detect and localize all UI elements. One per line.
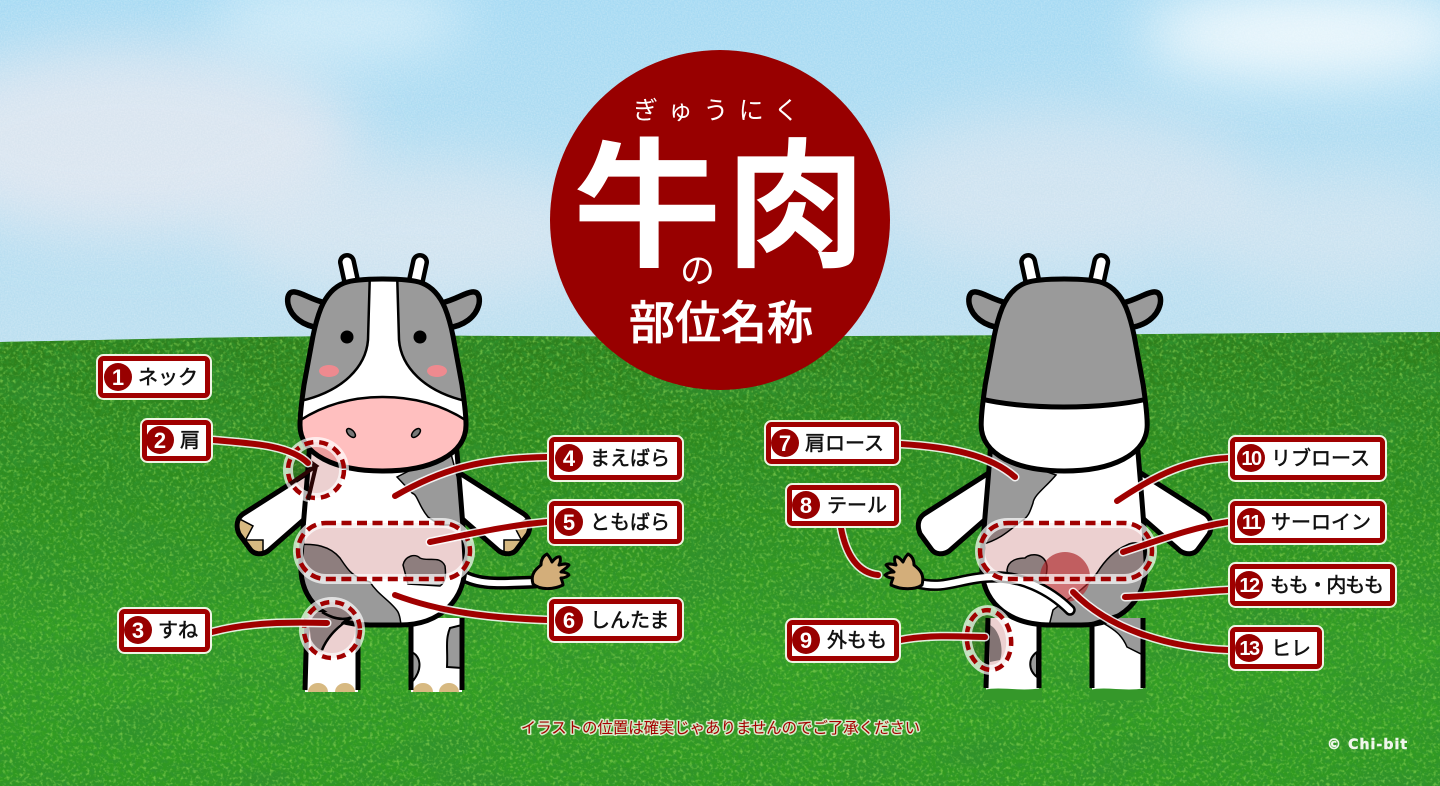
label 8: 8 — [800, 493, 812, 518]
copyright: © Chi-bit — [1327, 737, 1408, 753]
label 6: しんたま — [590, 610, 669, 632]
subtitle: 部位名称 — [629, 297, 813, 349]
ears — [288, 292, 479, 328]
label 12: 12 — [1239, 575, 1260, 597]
label 4: 4 — [563, 446, 576, 471]
label 6: 6 — [563, 608, 575, 633]
label 7 — [768, 424, 896, 462]
label 9: 外もも — [827, 629, 887, 652]
back cow — [885, 262, 1211, 695]
body — [296, 440, 470, 630]
nostrils — [345, 427, 422, 439]
label 9: 9 — [800, 628, 812, 653]
label 10 — [1232, 440, 1382, 478]
label 3: 3 — [132, 618, 144, 643]
label 12: もも・内もも — [1270, 574, 1384, 597]
label 11 — [1232, 504, 1382, 540]
label 5 — [552, 504, 680, 542]
label 13 — [1232, 630, 1320, 666]
highlighted zones — [288, 442, 1152, 673]
label 8: テール — [827, 495, 887, 517]
label 11: 11 — [1242, 512, 1261, 534]
reading: gyuuniku: ぎゅうにく — [633, 97, 809, 125]
particle no: の — [680, 252, 715, 291]
front cow — [230, 262, 569, 701]
title badge — [550, 50, 890, 390]
label 2: 2 — [154, 428, 166, 453]
legs — [302, 618, 464, 692]
arms — [918, 472, 1211, 554]
thigh detail — [308, 612, 350, 652]
zone: belly back — [980, 523, 1152, 579]
label 7: 肩ロース — [805, 433, 884, 455]
horns — [1028, 262, 1101, 285]
kanji: meat: 肉 — [726, 128, 866, 286]
horns — [347, 262, 420, 285]
label 1: ネック — [138, 366, 198, 389]
filet marker — [1040, 552, 1090, 602]
kanji: beef: 牛 — [573, 128, 721, 286]
arms — [230, 472, 537, 558]
label 11: サーロイン — [1271, 512, 1371, 534]
label 5: ともばら — [590, 511, 670, 534]
label 2: 肩 — [180, 430, 200, 452]
label 7: 7 — [779, 431, 791, 456]
grass over back hooves — [984, 688, 1146, 700]
background: sky with clouds — [0, 0, 1440, 345]
label 2 — [144, 422, 208, 458]
label 3 — [122, 612, 208, 650]
footnote: イラストの位置は確実じゃありませんのでご了承ください — [521, 719, 920, 737]
tail (back) — [885, 554, 1070, 610]
label 10: 10 — [1241, 448, 1262, 470]
label 1 — [100, 358, 208, 396]
label 8 — [790, 488, 896, 524]
zone: shin — [304, 602, 360, 658]
eyes — [340, 330, 426, 344]
body — [980, 440, 1152, 630]
leader lines — [212, 440, 1228, 650]
label 10: リブロース — [1271, 446, 1370, 470]
cheeks — [319, 365, 447, 377]
zone: outer thigh — [963, 607, 1015, 673]
background: grass field — [0, 330, 1440, 786]
head (back) — [977, 270, 1151, 471]
label 12 — [1232, 566, 1392, 604]
label 5: 5 — [563, 510, 575, 535]
legs — [984, 618, 1146, 690]
tail — [462, 554, 569, 589]
zone: shoulder — [288, 442, 344, 500]
label 6 — [552, 602, 680, 638]
ears — [969, 292, 1161, 328]
label 4 — [552, 440, 680, 478]
label 13: ヒレ — [1271, 638, 1311, 660]
label 13: 13 — [1239, 638, 1260, 660]
label 4: まえばら — [590, 447, 670, 470]
label 1: 1 — [112, 365, 124, 390]
zone: belly front — [298, 523, 470, 579]
label 3: すね — [158, 620, 198, 642]
label 9 — [790, 622, 896, 658]
head — [296, 270, 470, 480]
